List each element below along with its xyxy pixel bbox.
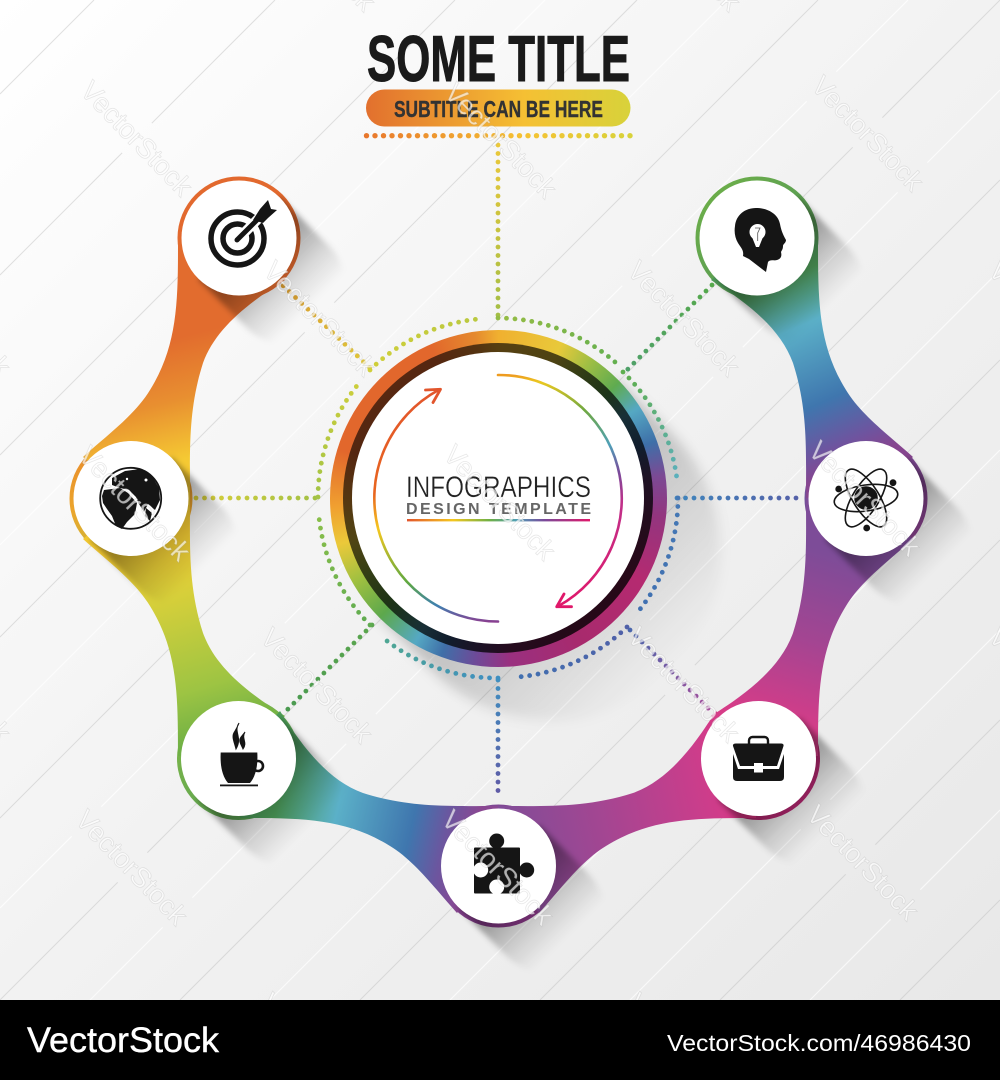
watermarks: VectorStock [436, 804, 560, 931]
title: SOME TITLE [367, 22, 630, 95]
central ring with rainbow gradient [330, 330, 667, 667]
watermarks: VectorStock [622, 621, 746, 748]
watermarks: VectorStock [75, 75, 199, 202]
watermarks: VectorStock [801, 799, 925, 926]
subtitle pill: SUBTITLE CAN BE HERE [394, 96, 603, 122]
node: target [182, 180, 346, 345]
curved arrow: left arc [374, 389, 498, 622]
centre label: DESIGN TEMPLATE [406, 501, 591, 518]
icon: head with light bulb [735, 208, 786, 272]
watermarks: VectorStock [255, 622, 379, 749]
icon: puzzle piece [473, 834, 534, 894]
watermarks: VectorStock [806, 70, 930, 197]
node rings [70, 176, 928, 928]
node: atom [808, 441, 973, 606]
footer bar: VectorStock [27, 1021, 220, 1060]
node: globe [74, 441, 238, 606]
centre label: INFOGRAPHICS [406, 471, 591, 504]
dotted rule under subtitle [366, 133, 632, 138]
chain band: gradient connectors between icon circles [83, 238, 913, 913]
icon: target with arrow [211, 200, 277, 265]
footer bar: VectorStock.com/46986430 [667, 1030, 971, 1056]
icon: atom [833, 463, 899, 533]
watermarks: VectorStock [803, 435, 927, 562]
subtitle pill [366, 90, 630, 126]
icon: globe [100, 468, 161, 529]
dotted spokes [196, 145, 800, 797]
dotted ring around centre [318, 318, 678, 678]
watermarks: VectorStock [622, 255, 746, 382]
node: head with idea [700, 180, 864, 345]
watermarks: VectorStock [438, 439, 562, 566]
shadow of central circle [379, 379, 721, 721]
node: coffee [181, 701, 346, 866]
node: puzzle [441, 808, 606, 973]
centre label [406, 471, 591, 521]
curved arrow: right arc [498, 375, 622, 607]
watermarks: VectorStock [73, 440, 197, 567]
icon: briefcase [733, 737, 784, 781]
watermarks: VectorStock [439, 77, 563, 204]
node: briefcase [701, 701, 866, 866]
watermarks: VectorStock [70, 804, 194, 931]
watermarks: VectorStock [258, 255, 382, 382]
footer bar [0, 1000, 1000, 1080]
icon: coffee cup [220, 723, 263, 786]
